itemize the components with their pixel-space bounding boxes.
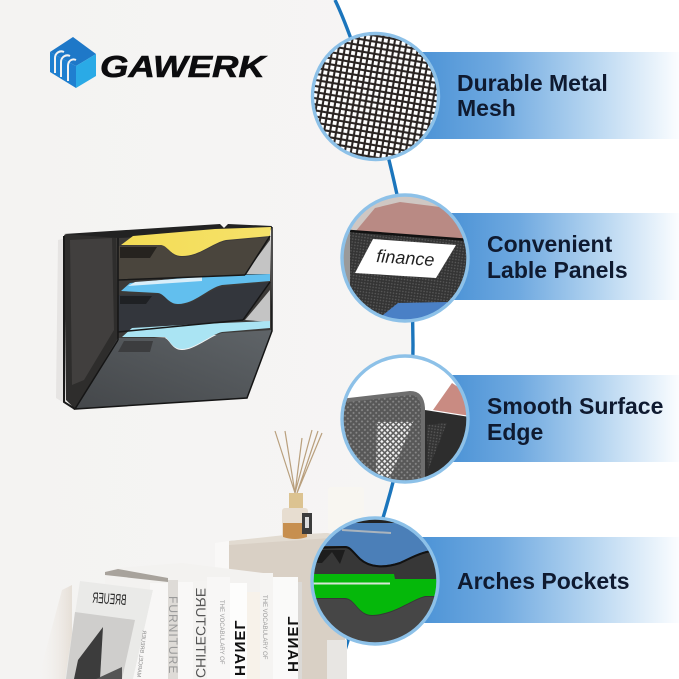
label text: Arches Pockets	[457, 568, 630, 594]
panel: Smooth Surface Edge	[340, 356, 679, 485]
books: BREUER	[92, 590, 127, 609]
label bar	[450, 213, 679, 300]
white cup	[328, 487, 364, 531]
label text: Smooth Surface	[487, 393, 663, 419]
label text: finance: finance	[376, 246, 435, 270]
frame outlines	[75, 227, 272, 409]
label text: Lable Panels	[487, 257, 628, 283]
label text: Mesh	[457, 95, 516, 121]
label bar	[420, 537, 679, 623]
wall shadow behind books	[38, 585, 72, 679]
yellow folder	[121, 227, 271, 256]
books: THE VOCABULARY OF	[218, 600, 224, 665]
panel: Convenient Lable Panels	[340, 195, 679, 322]
books: THE VOCABULARY OF	[261, 595, 267, 660]
left mesh side panel	[64, 234, 118, 409]
back panel	[115, 230, 272, 340]
reed diffuser	[275, 430, 322, 539]
right side mesh gaps	[245, 240, 270, 322]
label bar	[450, 375, 679, 462]
white spines	[168, 580, 178, 679]
top frame	[64, 224, 272, 238]
middle pocket	[118, 282, 270, 332]
icon: arches pocket circle	[310, 515, 440, 645]
curved blue divider line	[335, 0, 413, 679]
label text: Durable Metal	[457, 70, 608, 96]
panel: Arches Pockets	[310, 515, 679, 645]
top pocket	[118, 237, 270, 280]
front book: BREUER	[65, 581, 153, 679]
icon: blue cube	[50, 37, 96, 88]
icon: smooth edge circle	[340, 356, 470, 485]
logo wordmark: GAWERK	[100, 49, 268, 84]
label bar	[420, 52, 679, 139]
spine titles: FURNITURE	[166, 596, 180, 674]
light blue folder	[122, 321, 270, 349]
label text: Convenient	[487, 231, 613, 257]
back spine behind cover	[150, 583, 168, 679]
icon: metal mesh circle	[312, 34, 438, 160]
book at cabinet edge	[327, 640, 347, 679]
books: HANEL	[284, 615, 301, 672]
books: CHITECTURE	[193, 588, 209, 678]
books: MARCEL BREUER	[135, 630, 147, 677]
logo: GAWERK	[50, 37, 268, 88]
panel: Durable Metal Mesh	[312, 34, 679, 160]
cabinet	[215, 533, 345, 679]
label text: Edge	[487, 419, 543, 445]
book top surfaces	[105, 563, 298, 600]
bottom front pocket	[75, 330, 272, 409]
soft wall shadow	[56, 238, 66, 404]
blue folder	[121, 274, 270, 304]
product: wall mounted mesh file organizer	[56, 224, 272, 409]
wall background: left photo area	[0, 0, 413, 679]
icon: label panel circle	[340, 195, 470, 322]
books: HANEL	[231, 619, 248, 676]
books	[65, 563, 347, 679]
